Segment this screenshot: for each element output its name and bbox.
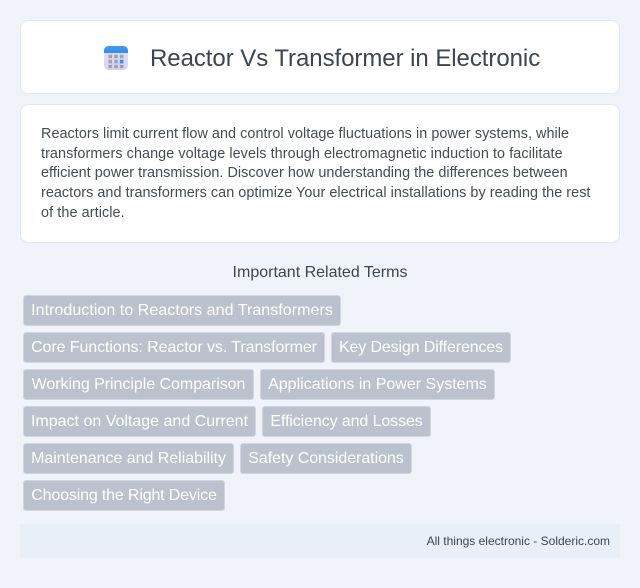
tag: Working Principle Comparison (32, 376, 245, 393)
tag (23, 369, 254, 400)
tag: Core Functions: Reactor vs. Transformer (31, 339, 317, 356)
intro text: Reactors limit current flow and control voltage fluctuations in power systems, while (41, 126, 569, 142)
intro text (41, 126, 590, 221)
intro text: efficient power transmission. Discover how understanding the differences between (41, 165, 568, 181)
header panel (20, 20, 620, 94)
tag (23, 406, 256, 437)
related terms tags (23, 295, 511, 511)
title: Reactor Vs Transformer in Electronic (150, 45, 540, 72)
intro text: of the article. (41, 205, 125, 221)
tag (23, 443, 234, 474)
intro text panel (20, 104, 620, 243)
tag: Key Design Differences (339, 339, 503, 356)
tag (262, 406, 431, 437)
tag: Choosing the Right Device (31, 487, 217, 504)
tag (331, 332, 511, 363)
tag: Impact on Voltage and Current (31, 413, 248, 430)
tag: Introduction to Reactors and Transformers (31, 302, 333, 319)
footer text: All things electronic - Solderic.com (427, 534, 610, 548)
tag: Applications in Power Systems (268, 376, 487, 393)
tag (23, 332, 325, 363)
tag (23, 295, 341, 326)
tag (240, 443, 412, 474)
intro text: transformers change voltage levels through electromagnetic induction to facilitate (41, 146, 563, 162)
related terms heading: Important Related Terms (233, 264, 407, 281)
icon: calendar (104, 46, 128, 70)
footer bar (20, 524, 620, 558)
intro text: reactors and transformers can optimize Your electrical installations by reading the rest (41, 185, 590, 201)
tag (23, 480, 225, 511)
tag: Maintenance and Reliability (31, 450, 226, 467)
tag (260, 369, 495, 400)
tag: Efficiency and Losses (270, 413, 423, 430)
tag: Safety Considerations (248, 450, 404, 467)
